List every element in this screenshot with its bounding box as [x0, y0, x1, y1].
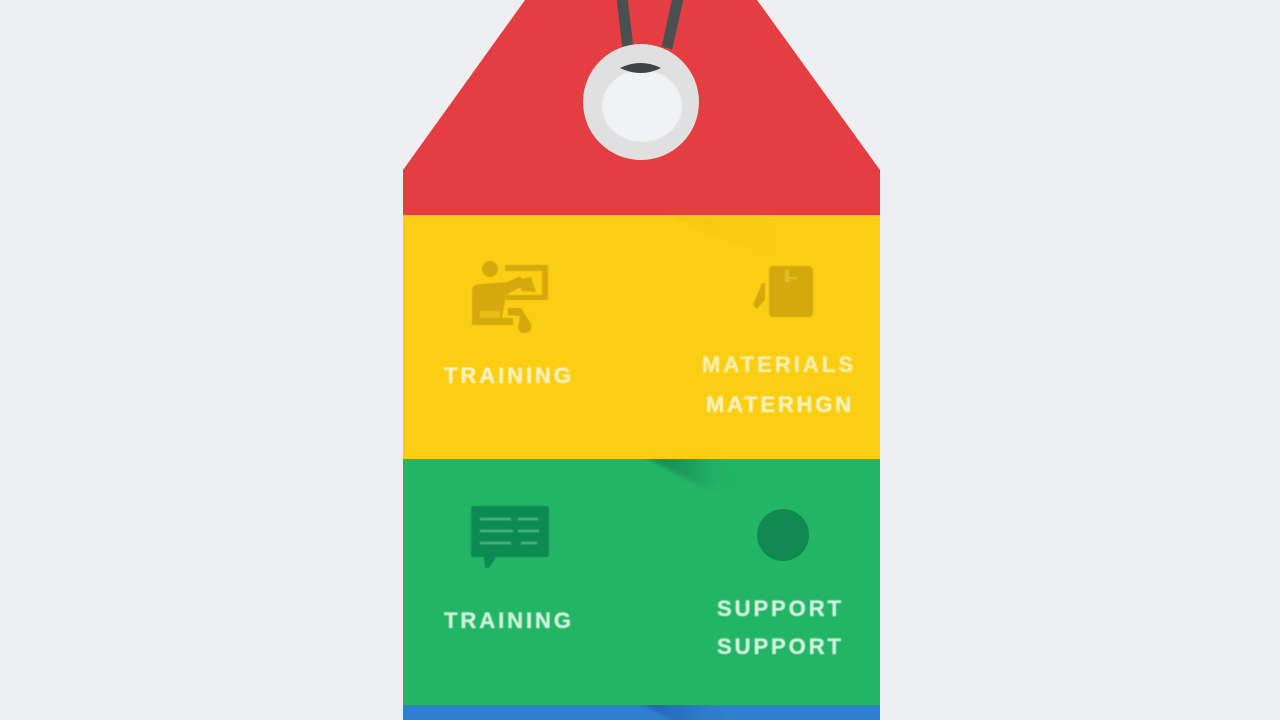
cord: dark string — [622, 0, 678, 48]
eyelet: white ring — [583, 44, 699, 160]
fold shadow: green band — [647, 459, 710, 486]
icon: support circle — [757, 509, 809, 561]
label: support second line: SUPPORT — [717, 634, 842, 659]
panel: red tag top — [403, 0, 880, 215]
fold shadow: yellow band — [670, 216, 790, 262]
label: support: SUPPORT — [717, 596, 842, 621]
fold shadow: blue band — [644, 705, 692, 720]
panel: yellow band — [403, 215, 880, 459]
icon: presenter at board — [472, 261, 548, 333]
icon: speech bubble — [471, 506, 549, 568]
label: materials second line: MATERHGN — [706, 392, 851, 417]
label: training: TRAINING — [444, 363, 571, 388]
label: training: TRAINING — [444, 608, 571, 633]
panel: blue band — [403, 705, 880, 720]
panel: green band — [403, 455, 880, 705]
icon: book — [753, 266, 813, 317]
label: materials: MATERIALS — [702, 352, 853, 377]
